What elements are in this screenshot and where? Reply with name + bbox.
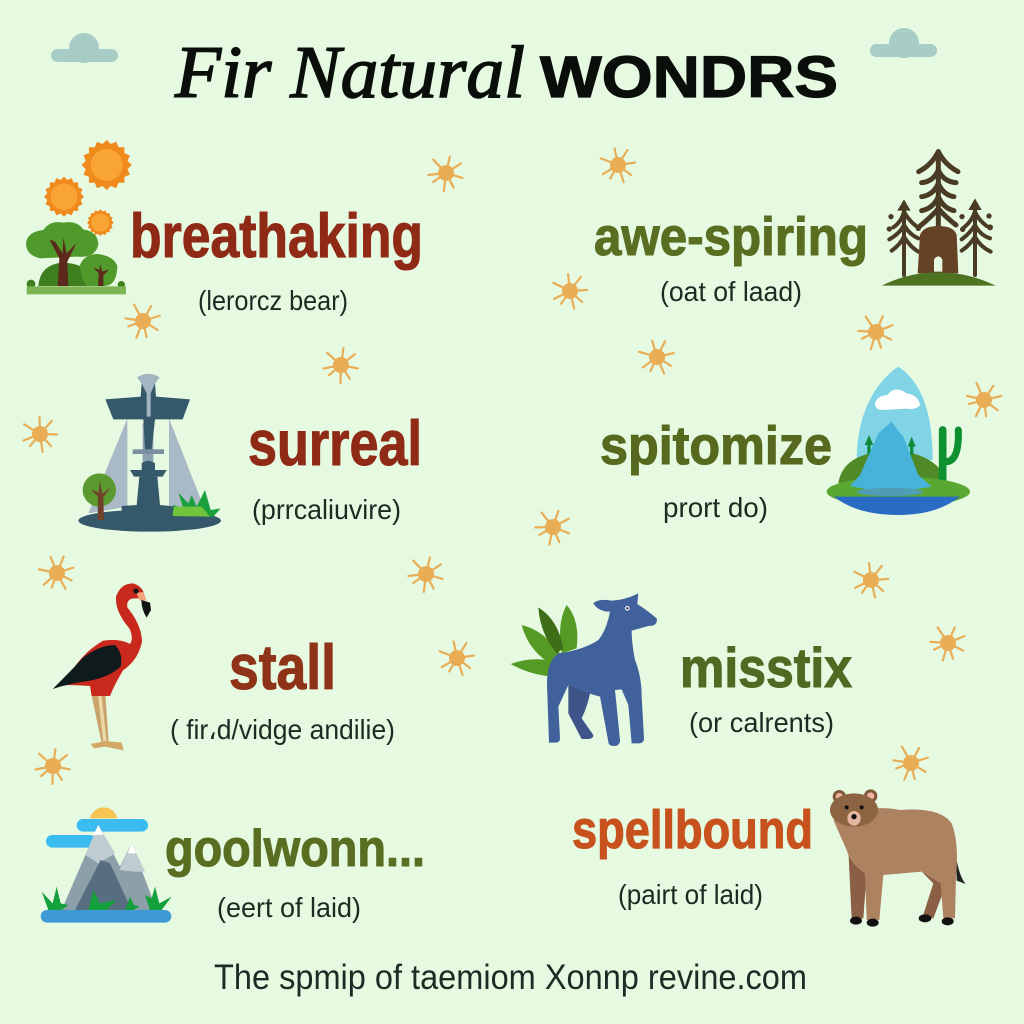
icon: right cloud [870,28,937,58]
caption: goolwonn: (eert of laid) [217,892,361,923]
word: spellbound: spellbound [572,800,813,860]
caption: awe-spiring: (oat of laad) [660,276,802,307]
caption: surreal: (prrcaliuvire) [252,494,401,525]
word: spitomize: spitomize [600,416,832,476]
icon: tower monument [78,374,221,532]
word: breathaking: breathaking [130,202,423,271]
word: stall: stall [229,633,336,703]
caption: stall: ( fir،d/vidge andilie) [170,714,395,745]
icon: forest and hut [882,152,996,286]
icon: waterfall island [827,367,970,515]
title: Fir Natural [174,32,525,114]
word: misstix: misstix [680,636,852,699]
title: WONDRS [540,45,838,110]
word: surreal: surreal [248,409,422,479]
icon: blue animal with leaves [511,593,657,746]
caption: breathaking: (lerorcz bear) [198,285,348,316]
footer: The spmip of taemiom Xonnp revine.com [214,958,807,997]
word: awe-spiring: awe-spiring [594,207,868,267]
caption: spitomize: prort do) [663,492,768,523]
caption: misstix: (or calrents) [689,707,834,738]
decorative sparkles [22,144,1007,786]
icon: left cloud [51,33,118,63]
icon: mountains [41,807,172,923]
icon: flamingo [53,583,151,750]
icon: bear [830,789,966,927]
word: goolwonn: goolwonn... [165,820,425,878]
title [174,32,838,114]
icon: suns and trees [26,140,132,294]
caption: spellbound: (pairt of laid) [618,879,763,910]
